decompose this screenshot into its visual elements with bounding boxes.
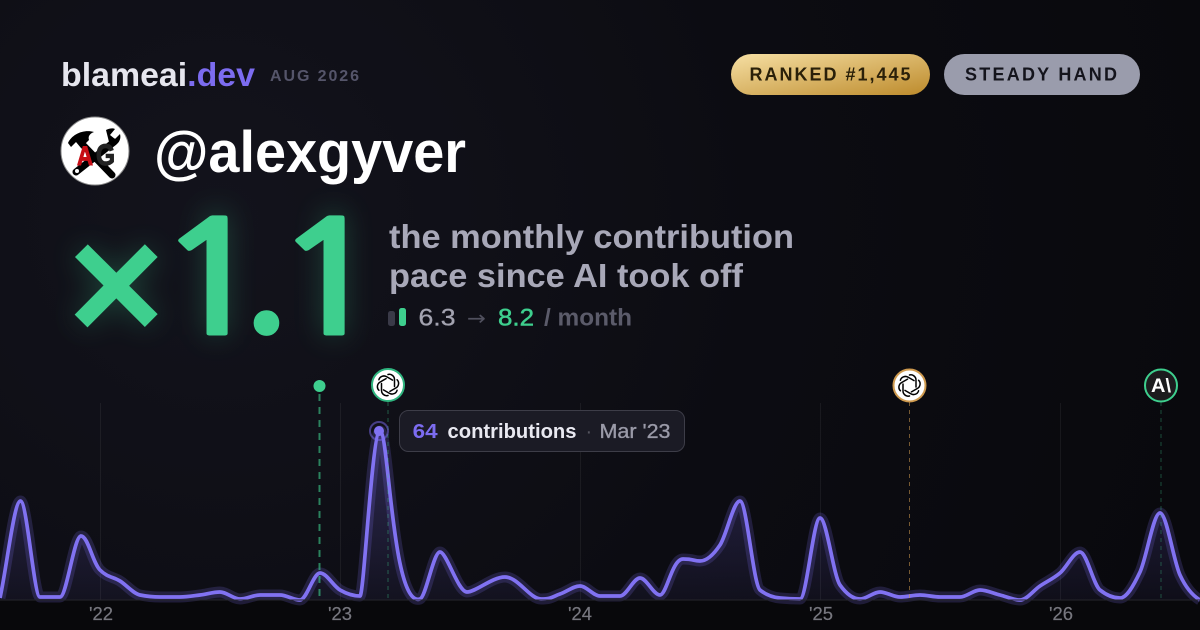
hero multiplier: 1 — [270, 202, 389, 359]
badge: archetype — [944, 54, 1140, 95]
badge: rank — [731, 54, 930, 95]
hero multiplier — [68, 185, 389, 377]
tooltip: · — [586, 421, 592, 443]
hero multiplier: × — [68, 192, 165, 377]
badge: rank: RANKED #1,445 — [750, 65, 910, 85]
marker: Anthropic release: A\ — [1151, 376, 1172, 397]
brand wordmark: blameai.dev — [61, 56, 256, 93]
pace comparison: 6.3 — [418, 304, 456, 332]
mini bars — [388, 308, 406, 326]
avatar — [61, 117, 129, 185]
year axis labels: '25 — [809, 604, 833, 624]
year axis labels: '22 — [89, 604, 113, 624]
pace comparison: 8.2 — [498, 304, 534, 332]
year grid lines — [100, 403, 1060, 600]
pace comparison: → — [467, 306, 486, 330]
hero multiplier: . — [240, 185, 291, 351]
year axis labels: '26 — [1049, 604, 1073, 624]
hero description: pace since AI took off — [389, 257, 744, 294]
badge: archetype: STEADY HAND — [965, 65, 1117, 85]
year axis labels: '23 — [328, 604, 352, 624]
username: @alexgyver — [154, 120, 466, 185]
year axis labels — [89, 604, 1073, 624]
pace comparison: / month — [544, 304, 632, 332]
peak marker — [370, 422, 388, 440]
hero description: the monthly contribution — [389, 218, 794, 255]
year axis labels: '24 — [568, 604, 592, 624]
marker: OpenAI release (green) — [372, 369, 404, 600]
marker: OpenAI release (orange) — [894, 370, 926, 600]
marker: Anthropic release — [1145, 370, 1177, 600]
contributions area chart — [0, 431, 1200, 600]
hero multiplier: 1 — [153, 202, 272, 359]
tooltip — [400, 410, 684, 452]
hero description — [389, 218, 794, 294]
pace comparison — [388, 304, 632, 332]
tooltip: 64 — [413, 421, 439, 443]
avatar: G — [96, 139, 115, 172]
avatar: A — [77, 141, 93, 171]
date label: AUG 2026 — [270, 68, 359, 85]
tooltip: Mar '23 — [600, 421, 670, 443]
tooltip: contributions — [448, 421, 576, 443]
marker: AI start — [314, 380, 326, 600]
